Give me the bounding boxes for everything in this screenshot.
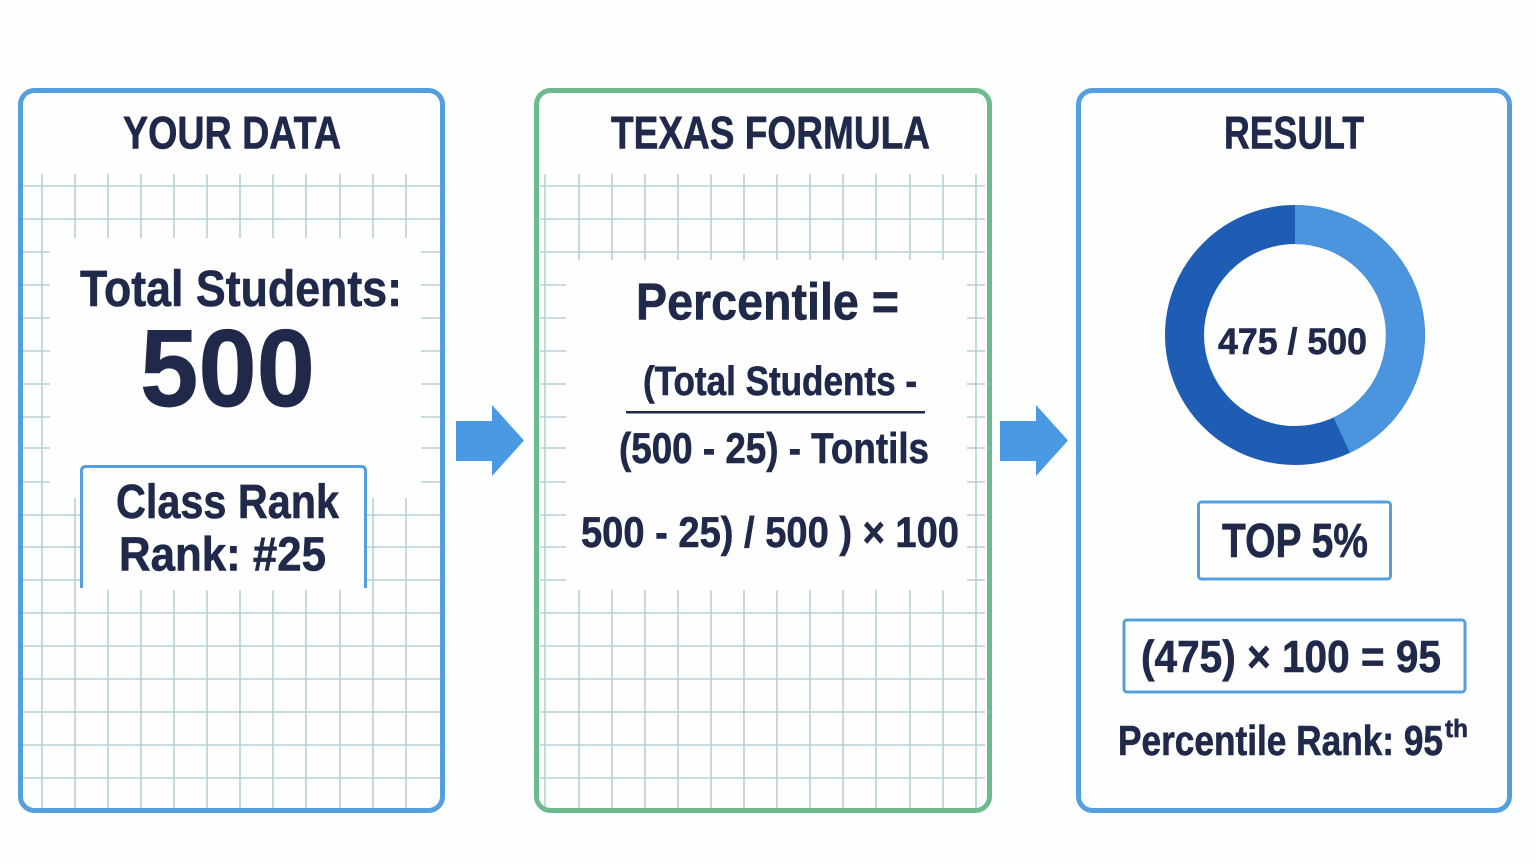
formula: fraction bar bbox=[626, 411, 925, 414]
badge: top 5%: TOP 5% bbox=[1222, 515, 1368, 568]
heading: texas formula: TEXAS FORMULA bbox=[611, 106, 930, 158]
label: total students: Total Students: bbox=[80, 260, 402, 317]
panel: your data bbox=[20, 90, 442, 810]
badge: top 5% bbox=[1198, 502, 1390, 579]
donut chart: 475 of 500: 475 / 500 bbox=[1218, 321, 1367, 362]
donut chart: 475 of 500 bbox=[1184, 224, 1406, 446]
arrow: data to formula bbox=[456, 405, 524, 476]
callout: class rank: Rank: #25 bbox=[119, 528, 326, 582]
panel: result bbox=[1078, 90, 1510, 810]
calculation box bbox=[1124, 620, 1465, 692]
calculation box: (475) × 100 = 95 bbox=[1141, 631, 1441, 682]
formula: denominator: (500 - 25) - Tontils bbox=[619, 425, 929, 473]
callout: class rank bbox=[82, 466, 366, 588]
heading: result: RESULT bbox=[1224, 106, 1364, 158]
arrow: formula to result bbox=[1000, 405, 1068, 476]
formula: numerator: (Total Students - bbox=[643, 358, 917, 404]
percentile rank result: Percentile Rank: 95 bbox=[1118, 717, 1443, 764]
percentile rank result: th bbox=[1445, 715, 1468, 743]
value: 500: 500 bbox=[140, 307, 315, 430]
formula: percentile equals: Percentile = bbox=[636, 274, 899, 332]
formula: worked expression: 500 - 25) / 500 ) × 100 bbox=[581, 509, 959, 557]
callout: class rank: Class Rank bbox=[116, 476, 339, 529]
panel: texas formula bbox=[536, 90, 990, 810]
heading: your data: YOUR DATA bbox=[123, 106, 341, 158]
